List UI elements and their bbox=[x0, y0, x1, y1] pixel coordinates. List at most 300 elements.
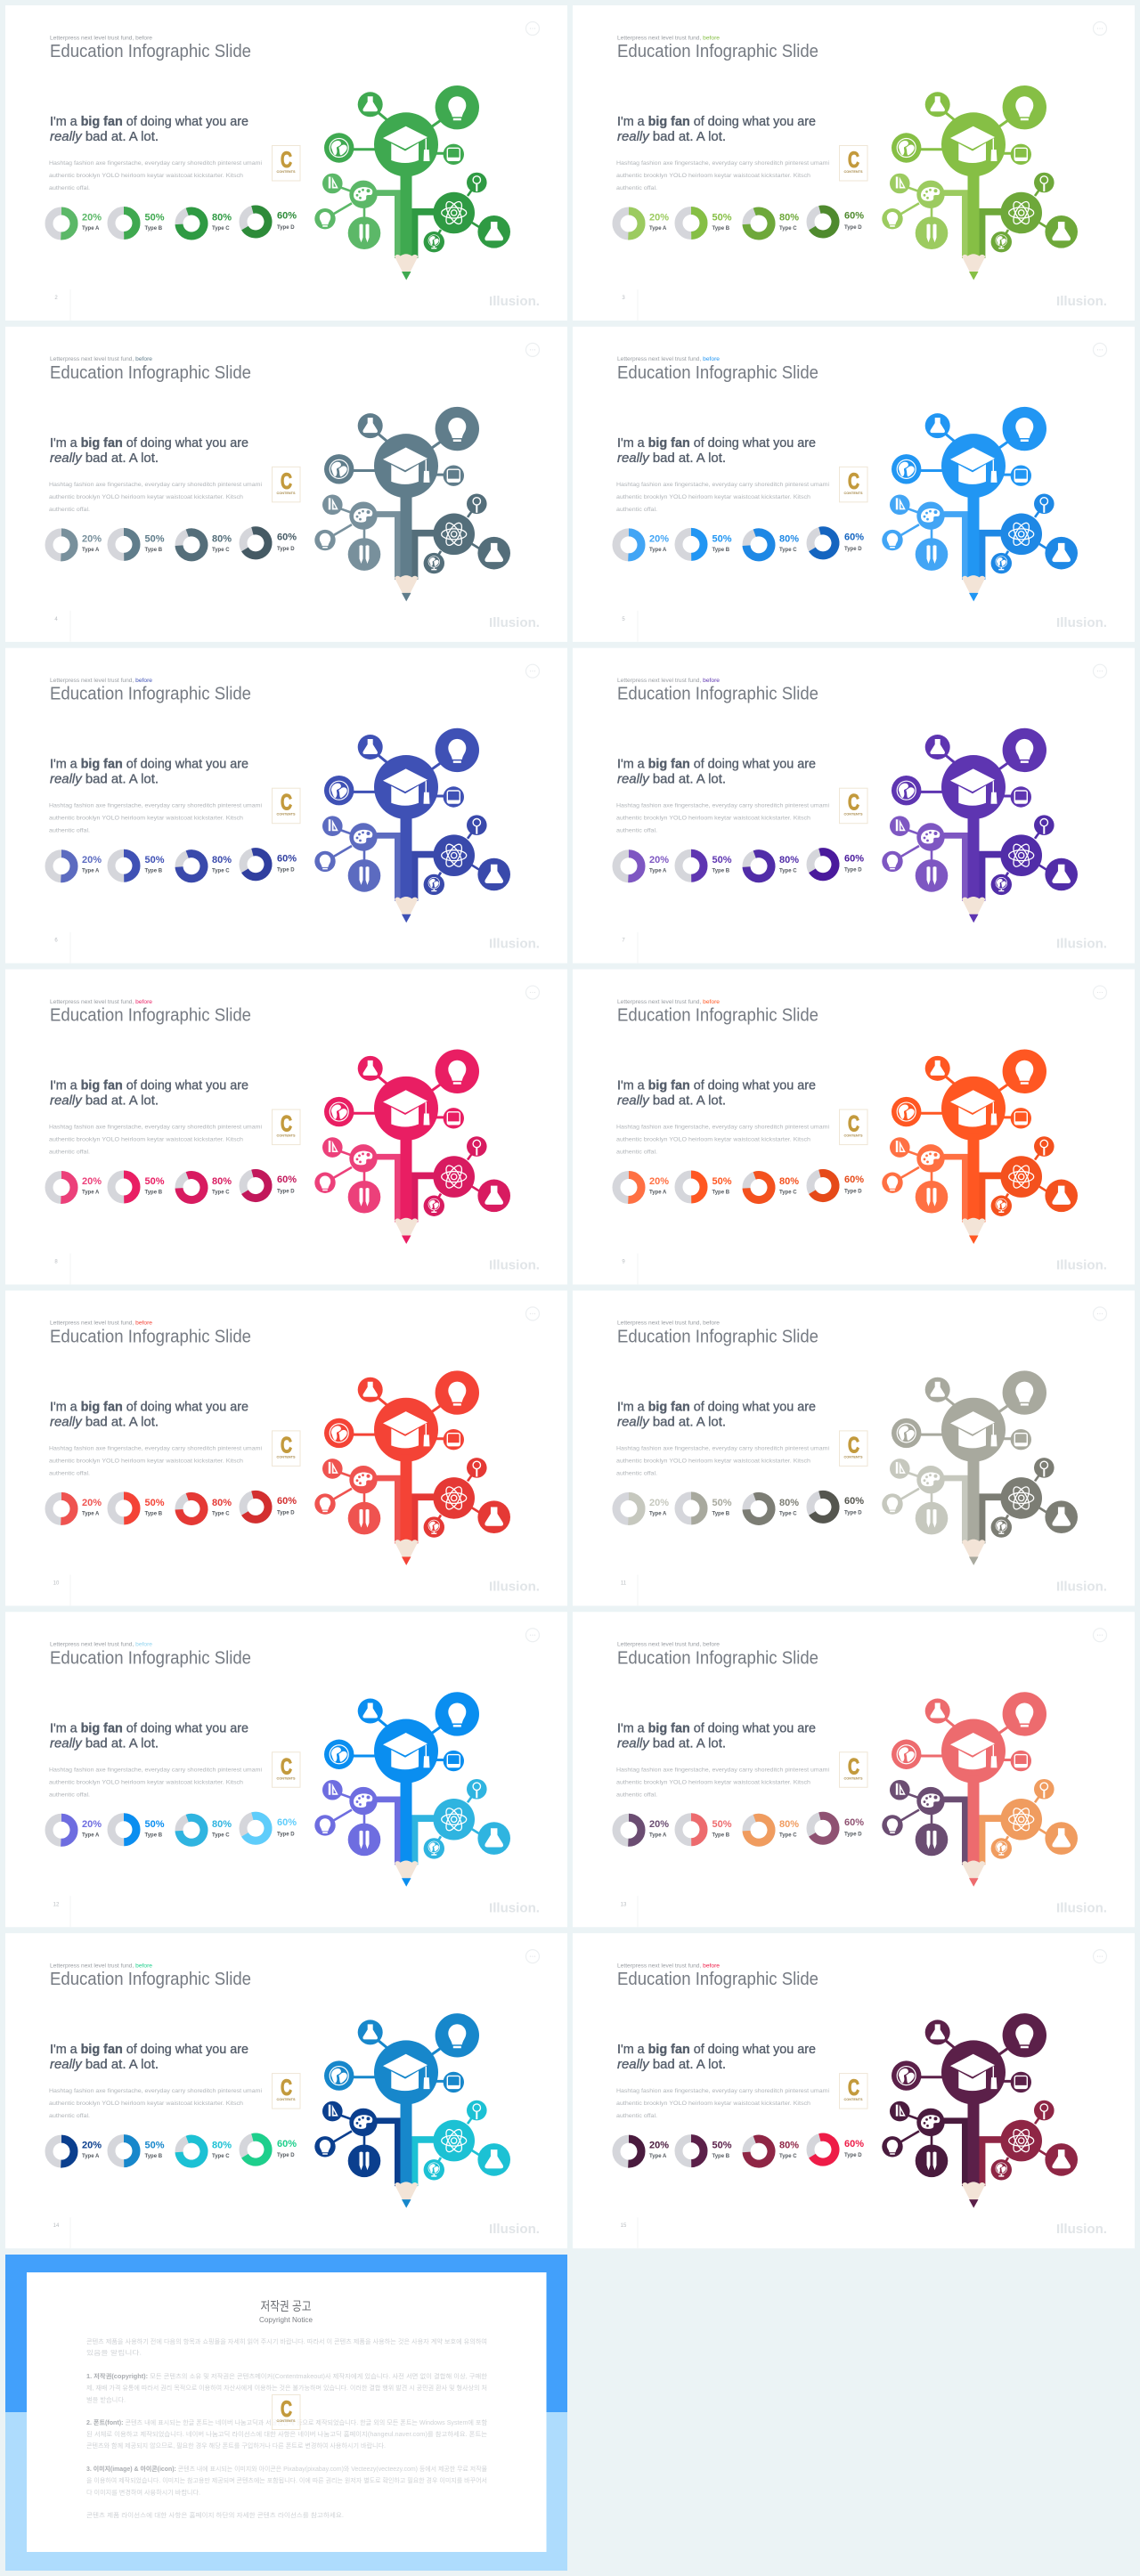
brand: Illusion. bbox=[1056, 937, 1107, 952]
logo: CONTENTS bbox=[276, 1454, 296, 1459]
logo: C bbox=[281, 2397, 292, 2422]
logo bbox=[839, 1109, 867, 1145]
percentage labels: 80% bbox=[212, 2141, 232, 2151]
percentage labels: Type B bbox=[144, 548, 163, 553]
donut charts bbox=[616, 528, 838, 561]
percentage labels: Type B bbox=[712, 548, 730, 553]
logo bbox=[273, 2395, 300, 2429]
small label: Letterpress next level trust fund, before bbox=[50, 1642, 152, 1648]
logo: CONTENTS bbox=[276, 1134, 296, 1138]
body text: authentic brooklyn YOLO heirloom keytar waistcoat kickstarter. Kitsch bbox=[49, 2101, 243, 2107]
percentage labels: 50% bbox=[144, 2141, 165, 2151]
brand: Illusion. bbox=[489, 937, 540, 952]
panel: wine slide bbox=[573, 1933, 1135, 2248]
page number: 6 bbox=[54, 939, 58, 944]
donut charts bbox=[616, 1491, 838, 1524]
icon: more menu bbox=[525, 21, 540, 36]
title: Education Infographic Slide bbox=[617, 1327, 818, 1346]
small label: Letterpress next level trust fund, before bbox=[50, 35, 152, 41]
heading: really bad at. A lot. bbox=[50, 2057, 159, 2072]
page number: 15 bbox=[621, 2223, 627, 2229]
logo: C bbox=[848, 148, 859, 173]
body text: authentic offal. bbox=[49, 185, 90, 191]
brand: Illusion. bbox=[489, 1900, 540, 1915]
icon: more menu bbox=[525, 986, 540, 999]
percentage labels bbox=[649, 2139, 864, 2159]
heading bbox=[617, 1078, 816, 1109]
panel: pink slide bbox=[5, 970, 567, 1285]
donut charts bbox=[49, 849, 271, 882]
heading bbox=[50, 1399, 248, 1429]
heading bbox=[50, 435, 248, 466]
title: Education Infographic Slide bbox=[50, 685, 251, 704]
page number: 10 bbox=[53, 1581, 60, 1586]
section 1: copyright: 1. 저작권(copyright): 모든 콘텐츠의 소유 및 저작권은 콘텐츠메이커(Contentmakeout)사 제작자에게 있습니다. 사전 서면 없이 결합해 이상, 구매한 bbox=[86, 2372, 488, 2380]
heading: I'm a big fan of doing what you are bbox=[617, 435, 816, 451]
logo: C bbox=[281, 469, 292, 494]
body text: Hashtag fashion axe fingerstache, everyday carry shoreditch pinterest umami bbox=[49, 803, 262, 809]
percentage labels: 50% bbox=[712, 855, 732, 865]
heading: really bad at. A lot. bbox=[617, 129, 726, 144]
panel: rose slide bbox=[573, 1612, 1135, 1927]
small label: Letterpress next level trust fund, before bbox=[50, 356, 152, 362]
title: Education Infographic Slide bbox=[617, 1648, 818, 1668]
body text: authentic brooklyn YOLO heirloom keytar waistcoat kickstarter. Kitsch bbox=[616, 1458, 810, 1464]
page number: 2 bbox=[54, 296, 58, 301]
title: Education Infographic Slide bbox=[617, 685, 818, 704]
donut charts bbox=[616, 1813, 838, 1846]
body text: Hashtag fashion axe fingerstache, everyday carry shoreditch pinterest umami bbox=[616, 1125, 829, 1131]
percentage labels: 20% bbox=[649, 1498, 669, 1508]
percentage labels: 20% bbox=[649, 855, 669, 865]
intro paragraph: 있음을 알립니다. bbox=[86, 2349, 142, 2356]
percentage labels: 20% bbox=[82, 1819, 102, 1830]
heading: really bad at. A lot. bbox=[617, 2057, 726, 2072]
small label: Letterpress next level trust fund, before bbox=[617, 1962, 720, 1969]
percentage labels: 60% bbox=[277, 2139, 297, 2149]
pencil tree diagram bbox=[882, 1050, 1078, 1244]
logo: CONTENTS bbox=[276, 1776, 296, 1780]
logo bbox=[839, 146, 867, 181]
heading: really bad at. A lot. bbox=[617, 1093, 726, 1109]
logo: CONTENTS bbox=[844, 1776, 863, 1780]
percentage labels: 80% bbox=[779, 533, 799, 544]
heading bbox=[617, 757, 816, 787]
heading: I'm a big fan of doing what you are bbox=[617, 1078, 816, 1093]
percentage labels: 20% bbox=[82, 1498, 102, 1508]
percentage labels: Type A bbox=[82, 1832, 100, 1838]
body text bbox=[616, 1125, 829, 1156]
logo: C bbox=[281, 148, 292, 173]
small label: Letterpress next level trust fund, before bbox=[50, 1962, 152, 1969]
heading: I'm a big fan of doing what you are bbox=[617, 757, 816, 772]
logo: C bbox=[848, 791, 859, 816]
title: Education Infographic Slide bbox=[50, 363, 251, 383]
panel: purple slide bbox=[573, 648, 1135, 963]
panel: blue slide bbox=[573, 327, 1135, 642]
brand: Illusion. bbox=[489, 1579, 540, 1594]
percentage labels bbox=[82, 853, 297, 874]
percentage labels bbox=[649, 211, 864, 232]
percentage labels: 20% bbox=[649, 2141, 669, 2151]
percentage labels: 50% bbox=[712, 2141, 732, 2151]
title: Education Infographic Slide bbox=[617, 42, 818, 61]
percentage labels: Type C bbox=[779, 1190, 797, 1196]
donut charts bbox=[616, 207, 838, 240]
logo: CONTENTS bbox=[844, 491, 863, 495]
percentage labels: 80% bbox=[779, 212, 799, 223]
logo: C bbox=[848, 1754, 859, 1779]
heading bbox=[50, 2042, 248, 2072]
percentage labels: 80% bbox=[779, 1498, 799, 1508]
body text bbox=[49, 482, 262, 513]
percentage labels: 20% bbox=[82, 533, 102, 544]
body text: Hashtag fashion axe fingerstache, everyday carry shoreditch pinterest umami bbox=[49, 2088, 262, 2094]
percentage labels: Type D bbox=[277, 547, 295, 552]
heading: really bad at. A lot. bbox=[617, 1414, 726, 1429]
heading: really bad at. A lot. bbox=[50, 129, 159, 144]
icon: more menu bbox=[1094, 21, 1106, 36]
small label: Letterpress next level trust fund, before bbox=[50, 999, 152, 1005]
percentage labels: Type C bbox=[212, 1190, 230, 1196]
logo: CONTENTS bbox=[844, 169, 863, 174]
body text: authentic brooklyn YOLO heirloom keytar waistcoat kickstarter. Kitsch bbox=[616, 173, 810, 179]
percentage labels: Type B bbox=[712, 226, 730, 232]
percentage labels: Type D bbox=[844, 1190, 862, 1195]
icon: more menu bbox=[525, 1950, 540, 1963]
percentage labels bbox=[649, 1817, 864, 1838]
body text: authentic brooklyn YOLO heirloom keytar waistcoat kickstarter. Kitsch bbox=[616, 2101, 810, 2107]
percentage labels: 20% bbox=[82, 212, 102, 223]
percentage labels: Type A bbox=[649, 548, 667, 553]
percentage labels: 60% bbox=[277, 1174, 297, 1185]
body text bbox=[616, 803, 829, 834]
percentage labels: 50% bbox=[144, 855, 165, 865]
pencil tree diagram bbox=[882, 2013, 1078, 2208]
panel: orange slide bbox=[573, 970, 1135, 1285]
percentage labels: 50% bbox=[144, 212, 165, 223]
logo bbox=[273, 1431, 300, 1466]
percentage labels: 20% bbox=[82, 2141, 102, 2151]
heading: I'm a big fan of doing what you are bbox=[50, 1399, 248, 1414]
percentage labels: 80% bbox=[779, 855, 799, 865]
body text bbox=[49, 1445, 262, 1476]
heading bbox=[50, 114, 248, 144]
percentage labels: 20% bbox=[649, 533, 669, 544]
logo: CONTENTS bbox=[844, 2097, 863, 2101]
section 2: font: 된 서체로 이용하고 제작되었습니다. 네이버 나눔고딕 라이선스에 대한 사항은 네이버 나눔고딕 홈페이지(hangeul.naver.com)를 참고하세요. 폰트는 bbox=[86, 2430, 488, 2438]
body text: Hashtag fashion axe fingerstache, everyday carry shoreditch pinterest umami bbox=[49, 1445, 262, 1451]
logo: CONTENTS bbox=[844, 1134, 863, 1138]
body text bbox=[49, 1125, 262, 1156]
logo: C bbox=[848, 1433, 859, 1458]
percentage labels: 60% bbox=[844, 2139, 864, 2149]
logo: C bbox=[281, 2076, 292, 2101]
body text: authentic offal. bbox=[49, 1792, 90, 1798]
percentage labels bbox=[649, 1496, 864, 1516]
copyright subheading: Copyright Notice bbox=[259, 2315, 313, 2324]
title: Education Infographic Slide bbox=[50, 1006, 251, 1026]
percentage labels: Type A bbox=[82, 1190, 100, 1196]
percentage labels: Type D bbox=[844, 547, 862, 552]
icon: more menu bbox=[525, 343, 540, 356]
section 3: image and icon: 3. 이미지(image) & 아이콘(icon): 콘텐츠 내에 표시되는 이미지와 아이콘은 Pixabay(pixabay.com)와 Vecteezy(vecteezy.com) 등에서 제공한 무료 저작물 bbox=[86, 2465, 488, 2473]
logo bbox=[273, 146, 300, 181]
heading: really bad at. A lot. bbox=[50, 1735, 159, 1751]
donut charts bbox=[49, 1170, 271, 1203]
page number: 8 bbox=[54, 1260, 58, 1265]
body text: authentic offal. bbox=[616, 1792, 657, 1798]
percentage labels bbox=[82, 532, 297, 553]
percentage labels: Type A bbox=[82, 1511, 100, 1516]
body text bbox=[616, 482, 829, 513]
body text: authentic brooklyn YOLO heirloom keytar waistcoat kickstarter. Kitsch bbox=[49, 173, 243, 179]
logo: CONTENTS bbox=[844, 812, 863, 817]
heading bbox=[617, 1399, 816, 1429]
percentage labels: Type B bbox=[144, 1832, 163, 1838]
body text: authentic brooklyn YOLO heirloom keytar waistcoat kickstarter. Kitsch bbox=[616, 1137, 810, 1143]
heading: I'm a big fan of doing what you are bbox=[617, 1720, 816, 1735]
percentage labels: 60% bbox=[277, 211, 297, 222]
percentage labels: 80% bbox=[779, 2141, 799, 2151]
percentage labels bbox=[82, 211, 297, 232]
percentage labels: Type B bbox=[144, 2154, 163, 2159]
percentage labels bbox=[82, 1817, 297, 1838]
section 2: font bbox=[86, 2418, 488, 2450]
percentage labels bbox=[82, 1496, 297, 1516]
percentage labels bbox=[82, 1174, 297, 1196]
body text: authentic brooklyn YOLO heirloom keytar waistcoat kickstarter. Kitsch bbox=[49, 494, 243, 500]
brand: Illusion. bbox=[1056, 1900, 1107, 1915]
heading: really bad at. A lot. bbox=[617, 772, 726, 787]
title: Education Infographic Slide bbox=[617, 363, 818, 383]
icon: more menu bbox=[1094, 343, 1106, 356]
percentage labels: 50% bbox=[712, 212, 732, 223]
percentage labels: 80% bbox=[212, 1819, 232, 1830]
body text: Hashtag fashion axe fingerstache, everyday carry shoreditch pinterest umami bbox=[616, 160, 829, 167]
percentage labels: Type D bbox=[844, 225, 862, 231]
percentage labels: Type B bbox=[712, 1511, 730, 1516]
body text bbox=[49, 2088, 262, 2119]
percentage labels: Type D bbox=[277, 2153, 295, 2158]
page number: 9 bbox=[622, 1260, 625, 1265]
page number: 3 bbox=[622, 296, 625, 301]
donut charts bbox=[616, 849, 838, 882]
body text: authentic offal. bbox=[616, 828, 657, 834]
donut charts bbox=[616, 1170, 838, 1203]
icon: more menu bbox=[525, 664, 540, 678]
body text bbox=[49, 1767, 262, 1798]
heading: I'm a big fan of doing what you are bbox=[50, 435, 248, 451]
intro paragraph bbox=[86, 2337, 487, 2356]
heading: really bad at. A lot. bbox=[617, 1735, 726, 1751]
page number: 11 bbox=[621, 1581, 627, 1586]
heading: I'm a big fan of doing what you are bbox=[50, 1720, 248, 1735]
percentage labels bbox=[82, 2139, 297, 2159]
percentage labels: 50% bbox=[712, 1176, 732, 1187]
percentage labels: Type B bbox=[144, 869, 163, 874]
heading: really bad at. A lot. bbox=[50, 1414, 159, 1429]
panel: slate slide bbox=[5, 327, 567, 642]
section 3: image and icon: 다 이미지를 변경하여 사용하시기 바랍니다. bbox=[86, 2488, 200, 2497]
body text: authentic offal. bbox=[49, 828, 90, 834]
heading bbox=[617, 2042, 816, 2072]
copyright heading: 저작권 공고 bbox=[260, 2299, 312, 2313]
brand: Illusion. bbox=[489, 294, 540, 309]
heading: I'm a big fan of doing what you are bbox=[50, 1078, 248, 1093]
percentage labels: Type D bbox=[844, 1832, 862, 1837]
percentage labels: Type A bbox=[649, 226, 667, 232]
percentage labels: Type B bbox=[712, 869, 730, 874]
section 1: copyright bbox=[86, 2372, 488, 2404]
percentage labels: Type A bbox=[82, 869, 100, 874]
percentage labels: 20% bbox=[649, 1176, 669, 1187]
percentage labels: 50% bbox=[712, 1498, 732, 1508]
percentage labels: 50% bbox=[144, 1176, 165, 1187]
percentage labels: Type D bbox=[844, 868, 862, 874]
percentage labels: Type C bbox=[779, 1832, 797, 1838]
pencil tree diagram bbox=[314, 1370, 510, 1565]
percentage labels: Type B bbox=[712, 1190, 730, 1196]
section 2: font: 콘텐츠와 함께 제공되지 않으므로, 필요한 경우 해당 폰트를 구입하거나 다른 폰트로 변경하여 사용하시기 바랍니다. bbox=[86, 2442, 386, 2450]
heading bbox=[617, 435, 816, 466]
icon: more menu bbox=[1094, 1950, 1106, 1963]
body text bbox=[616, 1767, 829, 1798]
body text: authentic offal. bbox=[616, 1150, 657, 1156]
percentage labels: Type C bbox=[779, 548, 797, 553]
title: Education Infographic Slide bbox=[617, 1970, 818, 1989]
percentage labels: Type D bbox=[277, 1190, 295, 1195]
logo bbox=[273, 1109, 300, 1145]
percentage labels: Type B bbox=[144, 1190, 163, 1196]
section 3: image and icon bbox=[86, 2465, 488, 2497]
panel: bright blue multicolor slide bbox=[5, 1612, 567, 1927]
donut charts bbox=[49, 207, 271, 240]
heading: really bad at. A lot. bbox=[617, 451, 726, 466]
percentage labels: 80% bbox=[212, 212, 232, 223]
small label: Letterpress next level trust fund, before bbox=[50, 1321, 152, 1327]
percentage labels: 80% bbox=[212, 1176, 232, 1187]
percentage labels bbox=[649, 853, 864, 874]
logo: C bbox=[848, 469, 859, 494]
heading bbox=[50, 1720, 248, 1751]
body text: authentic brooklyn YOLO heirloom keytar waistcoat kickstarter. Kitsch bbox=[49, 1779, 243, 1785]
percentage labels: Type A bbox=[649, 869, 667, 874]
percentage labels: Type C bbox=[212, 2154, 230, 2159]
small label: Letterpress next level trust fund, before bbox=[617, 1321, 720, 1327]
logo bbox=[273, 1752, 300, 1787]
body text bbox=[49, 803, 262, 834]
percentage labels: 60% bbox=[277, 532, 297, 543]
percentage labels: Type A bbox=[82, 2154, 100, 2159]
percentage labels: 20% bbox=[82, 1176, 102, 1187]
logo bbox=[839, 788, 867, 824]
donut charts bbox=[49, 528, 271, 561]
heading: I'm a big fan of doing what you are bbox=[50, 757, 248, 772]
percentage labels: 60% bbox=[277, 1496, 297, 1507]
body text: authentic offal. bbox=[616, 1470, 657, 1476]
title: Education Infographic Slide bbox=[50, 1648, 251, 1668]
body text: Hashtag fashion axe fingerstache, everyday carry shoreditch pinterest umami bbox=[616, 482, 829, 488]
logo bbox=[839, 1431, 867, 1466]
percentage labels: 60% bbox=[844, 1174, 864, 1185]
logo: C bbox=[848, 2076, 859, 2101]
pencil tree diagram bbox=[314, 728, 510, 922]
percentage labels: 80% bbox=[779, 1176, 799, 1187]
panel: lime slide bbox=[573, 5, 1135, 321]
page number: 14 bbox=[53, 2223, 60, 2229]
logo: CONTENTS bbox=[276, 2097, 296, 2101]
heading: I'm a big fan of doing what you are bbox=[50, 2042, 248, 2057]
pencil tree diagram bbox=[314, 1050, 510, 1244]
body text: authentic brooklyn YOLO heirloom keytar waistcoat kickstarter. Kitsch bbox=[49, 1137, 243, 1143]
logo bbox=[273, 2074, 300, 2109]
percentage labels: Type D bbox=[844, 2153, 862, 2158]
heading: I'm a big fan of doing what you are bbox=[617, 1399, 816, 1414]
logo bbox=[273, 788, 300, 824]
title: Education Infographic Slide bbox=[50, 1327, 251, 1346]
brand: Illusion. bbox=[1056, 1258, 1107, 1273]
small label: Letterpress next level trust fund, before bbox=[617, 678, 720, 684]
brand: Illusion. bbox=[1056, 615, 1107, 630]
percentage labels: 20% bbox=[82, 855, 102, 865]
small label: Letterpress next level trust fund, before bbox=[617, 999, 720, 1005]
percentage labels: 60% bbox=[277, 853, 297, 864]
heading: I'm a big fan of doing what you are bbox=[617, 2042, 816, 2057]
percentage labels: Type D bbox=[277, 1510, 295, 1516]
pencil tree diagram bbox=[314, 407, 510, 601]
heading bbox=[50, 1078, 248, 1109]
section 1: copyright: 제, 재배 가격 유통에 따라서 권리 목적으로 이용하여 자산사에게 이용하는 것은 불가능하며 있습니다. 이러한 결합 행위 발견 시 공민권 환사 및 형사상의 처 bbox=[86, 2384, 487, 2392]
pencil tree diagram bbox=[314, 2013, 510, 2208]
percentage labels: Type A bbox=[649, 2154, 667, 2159]
heading: I'm a big fan of doing what you are bbox=[50, 114, 248, 129]
heading bbox=[617, 114, 816, 144]
body text bbox=[49, 160, 262, 191]
percentage labels: 20% bbox=[649, 212, 669, 223]
logo: CONTENTS bbox=[276, 169, 296, 174]
body text: Hashtag fashion axe fingerstache, everyday carry shoreditch pinterest umami bbox=[49, 1125, 262, 1131]
body text bbox=[616, 160, 829, 191]
percentage labels: 80% bbox=[212, 1498, 232, 1508]
body text: authentic offal. bbox=[616, 2113, 657, 2119]
body text: authentic brooklyn YOLO heirloom keytar waistcoat kickstarter. Kitsch bbox=[49, 816, 243, 822]
percentage labels: Type C bbox=[779, 2154, 797, 2159]
small label: Letterpress next level trust fund, before bbox=[50, 678, 152, 684]
body text: Hashtag fashion axe fingerstache, everyday carry shoreditch pinterest umami bbox=[49, 1767, 262, 1773]
icon: more menu bbox=[525, 1629, 540, 1642]
title: Education Infographic Slide bbox=[50, 1970, 251, 1989]
percentage labels: Type C bbox=[212, 548, 230, 553]
pencil tree diagram bbox=[314, 1692, 510, 1887]
donut charts bbox=[616, 2134, 838, 2167]
heading: really bad at. A lot. bbox=[50, 1093, 159, 1109]
percentage labels bbox=[649, 532, 864, 553]
percentage labels: Type D bbox=[277, 868, 295, 874]
pencil tree diagram bbox=[882, 85, 1078, 280]
title: Education Infographic Slide bbox=[617, 1006, 818, 1026]
heading: really bad at. A lot. bbox=[50, 451, 159, 466]
pencil tree diagram bbox=[314, 85, 510, 280]
percentage labels: 60% bbox=[844, 211, 864, 222]
section 3: image and icon: 을 이용하여 제작되었습니다. 이미지는 참고용만 제공되며 콘텐츠에는 포함됩니다. 이에 따른 권리는 원저자 별도로 확인하고 필요한 경우 이미지를 바꾸어서 bbox=[86, 2476, 487, 2484]
percentage labels: Type C bbox=[779, 1511, 797, 1516]
percentage labels: Type B bbox=[144, 226, 163, 232]
percentage labels: 60% bbox=[844, 532, 864, 543]
brand: Illusion. bbox=[489, 1258, 540, 1273]
percentage labels: Type C bbox=[212, 226, 230, 232]
logo: C bbox=[281, 791, 292, 816]
